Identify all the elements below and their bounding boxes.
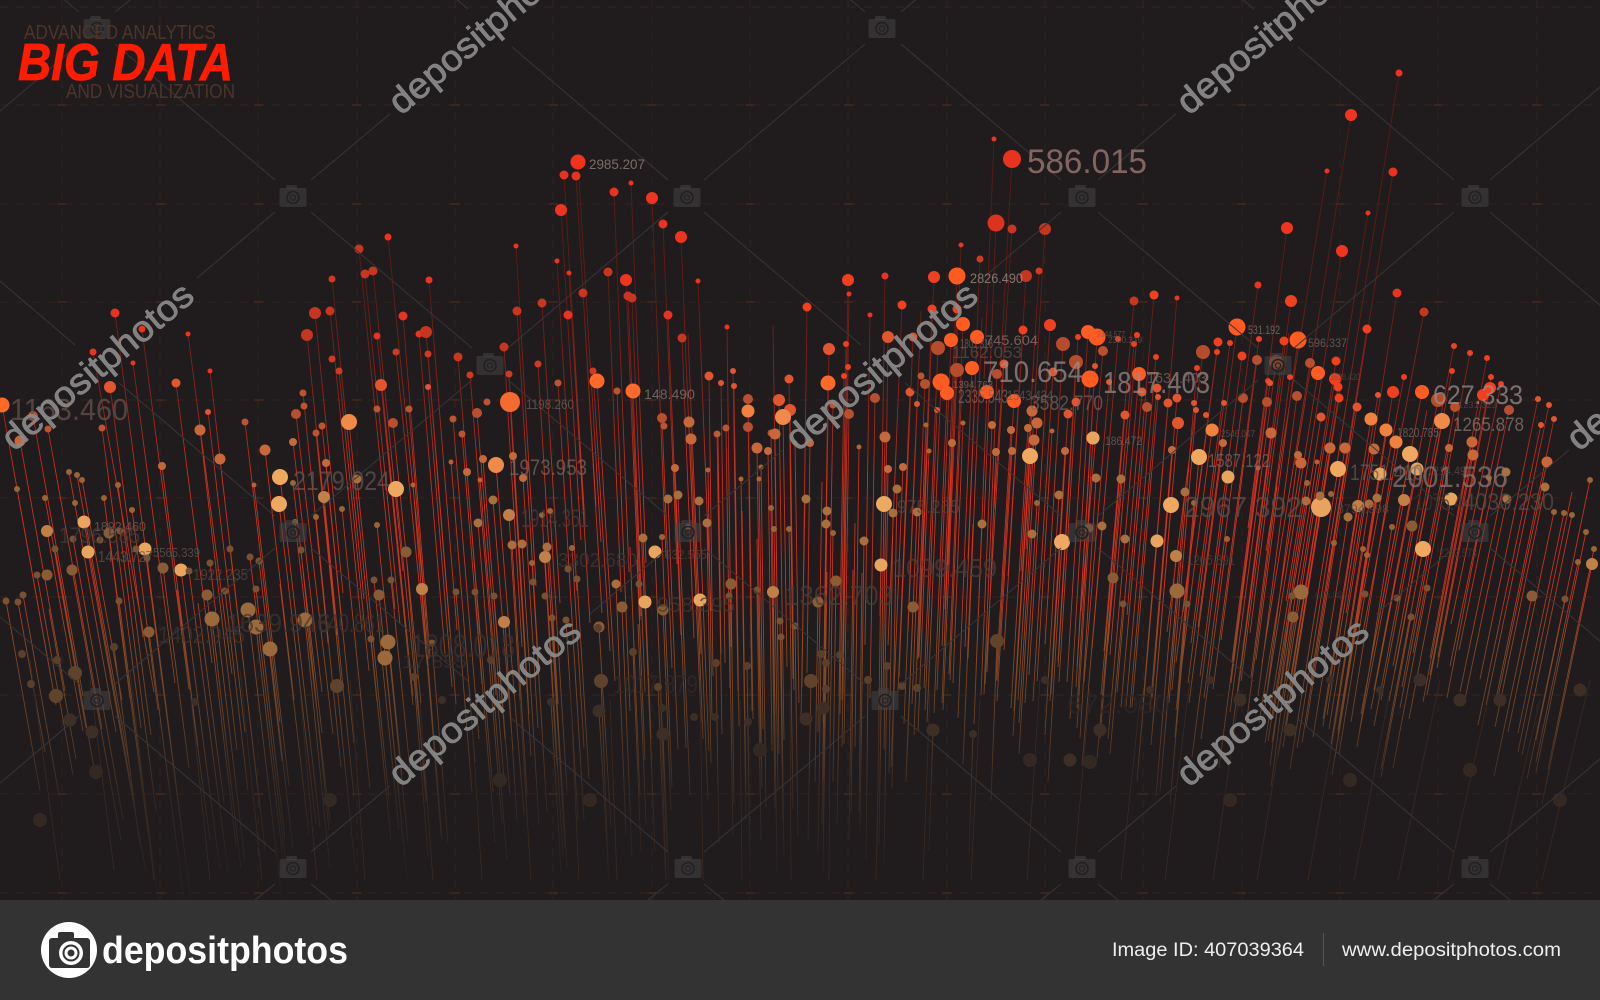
website: www.depositphotos.com bbox=[1341, 940, 1561, 961]
footer bar bbox=[0, 900, 1600, 1000]
value labels: 1914.351 bbox=[521, 505, 589, 533]
data dots bbox=[2, 73, 1594, 820]
footer logo icon bbox=[41, 922, 97, 978]
footer logo wordmark: depositphotos bbox=[102, 930, 348, 972]
value labels: 2546.047 bbox=[1221, 429, 1255, 440]
value labels: 1162.053 bbox=[952, 343, 1022, 362]
depositphotos diagonal watermarks: depositphotos bbox=[1168, 610, 1376, 794]
dim orange dots bbox=[33, 344, 1509, 434]
value labels: 2826.490 bbox=[970, 270, 1023, 286]
title: and visualization: AND VISUALIZATION bbox=[66, 81, 235, 103]
value labels: 3302.680 bbox=[558, 550, 637, 572]
value labels: 596.337 bbox=[1308, 336, 1347, 350]
value labels: 672.080 bbox=[1067, 689, 1170, 719]
value labels: 4030.230 bbox=[1463, 489, 1554, 516]
hot orange dots bbox=[2, 276, 1554, 430]
red top dots bbox=[93, 73, 1424, 375]
value labels: 2985.207 bbox=[589, 156, 645, 172]
value labels: 2179.024 bbox=[293, 466, 390, 496]
value labels: 1973.953 bbox=[509, 455, 587, 480]
value labels: 531.192 bbox=[1248, 323, 1280, 337]
value labels bbox=[10, 143, 1554, 719]
value labels: 1543.434 bbox=[1007, 387, 1053, 403]
value labels: 1214.498 bbox=[1427, 464, 1472, 478]
value labels: 1587.122 bbox=[1208, 451, 1270, 471]
footer divider bbox=[1323, 933, 1324, 966]
value labels: 1394.763 bbox=[953, 380, 993, 391]
value labels: 1198.260 bbox=[526, 396, 574, 412]
value labels: 932.555 bbox=[665, 547, 707, 562]
depositphotos diagonal watermarks: depositphotos bbox=[777, 274, 985, 458]
value labels: 1075.4 bbox=[1415, 489, 1463, 516]
depositphotos diagonal watermarks bbox=[0, 0, 1600, 794]
mid tan dots bbox=[6, 526, 1565, 658]
value labels: 958.395 bbox=[657, 594, 735, 617]
title: big data: BIG DATA bbox=[18, 34, 233, 92]
image id: Image ID: 407039364 bbox=[1112, 940, 1304, 961]
value labels: 1892.460 bbox=[94, 519, 146, 534]
value labels: 1628.420 bbox=[1330, 372, 1360, 382]
value labels: 186.472 bbox=[1105, 434, 1142, 448]
value labels: 1751.410 bbox=[1350, 460, 1423, 485]
title: advanced analytics: ADVANCED ANALYTICS bbox=[24, 22, 216, 44]
value labels: 1017.879 bbox=[613, 671, 698, 699]
value labels: 1362.703 bbox=[785, 580, 893, 611]
value labels: 1265.878 bbox=[1453, 415, 1524, 436]
camera watermark icons bbox=[84, 16, 1488, 878]
value labels: 1820.785 bbox=[1397, 425, 1439, 440]
value labels: 2300.319 bbox=[1108, 335, 1142, 345]
value labels: 975.265 bbox=[897, 497, 960, 517]
dim and faded dots bbox=[22, 628, 1580, 820]
value labels: 8794.998 bbox=[1337, 502, 1389, 516]
title block bbox=[18, 22, 235, 103]
value labels: 3582.770 bbox=[1030, 392, 1103, 415]
faint lower lines bbox=[30, 660, 1590, 880]
value labels: 1231.323 bbox=[1458, 400, 1497, 410]
value labels: 1808.018 bbox=[411, 628, 515, 664]
value labels: 2001.536 bbox=[1392, 461, 1508, 494]
value labels: 675.005 bbox=[1315, 590, 1348, 601]
value labels: 1402.945 bbox=[158, 622, 245, 649]
value labels: 1796.585 bbox=[59, 523, 140, 548]
value labels: 586.015 bbox=[1027, 143, 1147, 181]
value labels: 2967.392 bbox=[1184, 492, 1302, 524]
value labels: 1163.460 bbox=[10, 392, 128, 427]
depositphotos diagonal watermarks: depositphotos bbox=[380, 610, 588, 794]
tan orange dots bbox=[20, 411, 1547, 485]
value labels: 5565.339 bbox=[153, 545, 200, 560]
value labels: 1639.946 bbox=[226, 608, 331, 638]
value labels: 1443.727 bbox=[98, 549, 153, 566]
value labels: 148.490 bbox=[644, 386, 695, 402]
value labels: 1634.403 bbox=[1147, 370, 1207, 387]
value labels: 2283.573 bbox=[1439, 546, 1477, 560]
value labels: 1817.403 bbox=[1103, 365, 1210, 400]
value labels: 2344.577 bbox=[1097, 330, 1125, 339]
value labels: 17.855 bbox=[402, 652, 467, 672]
value labels: 745.604 bbox=[985, 332, 1038, 348]
value labels: 710.654 bbox=[983, 356, 1083, 389]
value labels: 1801.316 bbox=[960, 336, 993, 351]
light tan dots bbox=[17, 438, 1594, 622]
value labels: 1206.891 bbox=[1187, 552, 1235, 569]
value labels: 1922.235 bbox=[193, 567, 248, 584]
value labels: 627.333 bbox=[1433, 380, 1523, 410]
value labels: 840.861 bbox=[318, 608, 385, 638]
value labels: 2335.543 bbox=[958, 387, 1008, 408]
value labels: 1099.459 bbox=[892, 553, 997, 583]
